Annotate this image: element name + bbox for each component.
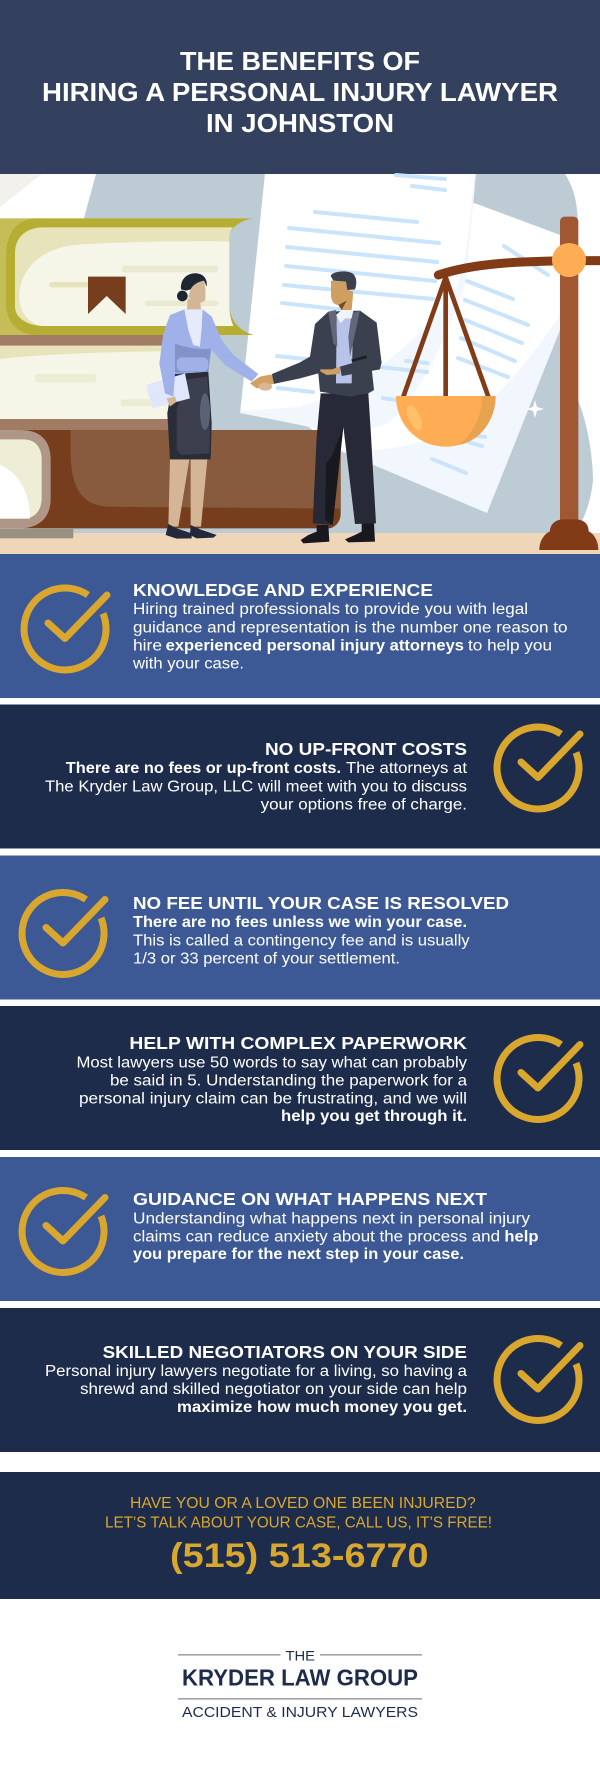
body text — [133, 914, 470, 968]
icon: check circle — [22, 892, 105, 974]
body text — [45, 760, 468, 814]
call to action text — [105, 1495, 492, 1532]
title: HIRING A PERSONAL INJURY LAWYER — [42, 77, 558, 107]
body text: personal injury claim can be frustrating, and we will — [79, 1090, 467, 1108]
logo: The Kryder Law Group: THE — [286, 1648, 315, 1664]
icon: check circle — [497, 727, 580, 809]
body text: shrewd and skilled negotiator on your side can help — [80, 1381, 467, 1398]
panel: help with complex paperwork — [0, 1006, 600, 1150]
body text: you prepare for the next step in your case. — [133, 1246, 464, 1263]
panel: knowledge and experience — [0, 554, 600, 698]
body text: The Kryder Law Group, LLC will meet with you to discuss — [45, 778, 467, 796]
panel: no up-front costs — [0, 704, 600, 848]
paper documents — [240, 174, 560, 513]
floor — [0, 533, 600, 554]
icon: check circle — [497, 1037, 580, 1119]
sparkle — [526, 400, 544, 418]
heading: SKILLED NEGOTIATORS ON YOUR SIDE — [103, 1342, 467, 1362]
illustration: lawyer handshake with books and scales — [0, 174, 600, 554]
body text: Most lawyers use 50 words to say what can probably — [76, 1054, 467, 1072]
logo: The Kryder Law Group: ACCIDENT & INJURY LAWYERS — [182, 1705, 418, 1721]
body text: help you get through it. — [281, 1108, 467, 1125]
body text: guidance and representation is the number one reason to — [133, 620, 568, 636]
call to action text: LET’S TALK ABOUT YOUR CASE, CALL US, IT’S FREE! — [105, 1514, 492, 1532]
body text: hire — [133, 638, 162, 654]
woman lawyer — [146, 273, 258, 539]
body text: experienced personal injury attorneys — [166, 638, 464, 654]
body text — [133, 1210, 538, 1263]
body text: Hiring trained professionals to provide you with legal — [133, 601, 528, 618]
title: THE BENEFITS OF — [180, 46, 420, 76]
logo: The Kryder Law Group: KRYDER LAW GROUP — [182, 1664, 418, 1690]
icon: check circle — [22, 1190, 105, 1272]
body text — [45, 1363, 467, 1416]
icon: check circle — [24, 588, 107, 670]
body text: There are no fees or up-front costs. — [66, 760, 341, 777]
logo: The Kryder Law Group — [178, 1648, 422, 1721]
body text — [76, 1054, 467, 1125]
heading: NO FEE UNTIL YOUR CASE IS RESOLVED — [133, 893, 509, 913]
panel: guidance on what happens next — [0, 1157, 600, 1301]
body text: be said in 5. Understanding the paperwork for a — [110, 1072, 467, 1090]
body text — [132, 601, 568, 672]
body text: The attorneys at — [346, 760, 468, 777]
heading: HELP WITH COMPLEX PAPERWORK — [129, 1033, 467, 1053]
body text: help — [504, 1228, 538, 1246]
title — [42, 46, 558, 138]
body text: Understanding what happens next in personal injury — [133, 1210, 530, 1228]
call to action panel — [0, 1472, 600, 1599]
handshake — [250, 374, 274, 391]
call to action text: HAVE YOU OR A LOVED ONE BEEN INJURED? — [130, 1495, 476, 1512]
body text: This is called a contingency fee and is usually — [133, 932, 470, 950]
phone number: (515) 513-6770 — [170, 1537, 429, 1575]
panel: no fee until resolved — [0, 856, 600, 1000]
title: IN JOHNSTON — [206, 108, 394, 138]
body text: your options free of charge. — [261, 796, 467, 814]
heading: GUIDANCE ON WHAT HAPPENS NEXT — [133, 1189, 487, 1209]
heading: NO UP-FRONT COSTS — [265, 739, 467, 759]
body text: 1/3 or 33 percent of your settlement. — [133, 950, 400, 968]
panel: skilled negotiators — [0, 1308, 600, 1452]
body text: claims can reduce anxiety about the process and — [133, 1228, 500, 1246]
header banner — [0, 0, 600, 174]
body text: There are no fees unless we win your case. — [133, 914, 467, 931]
body text: Personal injury lawyers negotiate for a living, so having a — [45, 1363, 467, 1380]
heading: KNOWLEDGE AND EXPERIENCE — [133, 580, 433, 600]
stack of law books — [0, 218, 341, 538]
man lawyer — [272, 271, 382, 543]
body text: with your case. — [132, 656, 244, 672]
scales of justice — [396, 217, 600, 550]
icon: check circle — [497, 1338, 580, 1420]
body text: maximize how much money you get. — [177, 1399, 467, 1416]
body text: to help you — [468, 638, 552, 654]
